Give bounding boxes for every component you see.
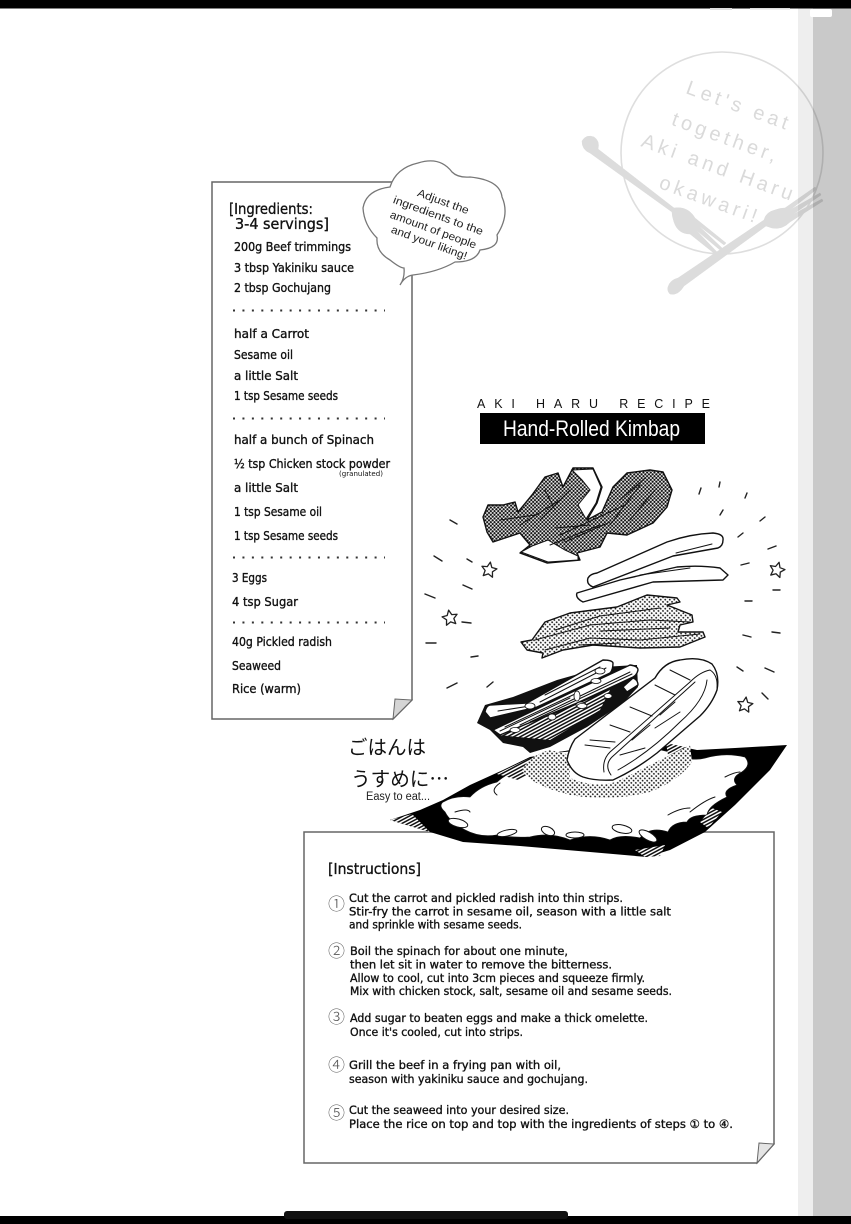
paper fold [393, 699, 412, 719]
eyebrow: AKI HARU RECIPE [477, 397, 710, 411]
paper fold [757, 1143, 774, 1163]
top status bar [0, 0, 851, 17]
step 4: season with yakiniku sauce and gochujang. [349, 1072, 588, 1086]
speech bubble: adjust the ingredients: and your liking! [389, 224, 469, 262]
group: spinach: half a bunch of Spinach [234, 433, 374, 447]
group: carrot: half a Carrot [234, 327, 309, 341]
stamp text: Aki and Haru [638, 130, 800, 207]
speech bubble: adjust the ingredients: amount of people [388, 209, 478, 251]
beef [483, 468, 672, 563]
group: spinach: 1 tsp Sesame oil [234, 505, 322, 519]
step 2 [328, 937, 672, 998]
group: other: Seaweed [232, 659, 281, 673]
fork right [668, 187, 823, 294]
group: carrot: Sesame oil [234, 348, 293, 362]
step 2: ② [328, 937, 345, 962]
motion lines [425, 482, 780, 699]
group: eggs: 3 Eggs [232, 571, 267, 585]
instructions paper [304, 832, 774, 1163]
bottom bar [0, 1211, 851, 1224]
spinach [521, 595, 705, 658]
title box [480, 413, 705, 444]
group: other: 40g Pickled radish [232, 635, 332, 649]
title: aki haru recipe [477, 397, 710, 444]
step 4 [328, 1051, 588, 1086]
step 1 [328, 890, 671, 932]
title text: Hand-Rolled Kimbap [503, 416, 680, 441]
group: beef: 200g Beef trimmings [234, 240, 351, 254]
step 2: Mix with chicken stock, salt, sesame oil and sesame seeds. [350, 984, 672, 998]
note: easy to eat [348, 731, 449, 803]
group: spinach [234, 433, 390, 543]
group: other [232, 635, 332, 696]
group: carrot [234, 327, 338, 403]
seaweed hatching [390, 743, 722, 857]
group: beef: 2 tbsp Gochujang [234, 281, 331, 295]
speech bubble: adjust the ingredients: ingredients to the [391, 194, 485, 238]
stamp text: Let's eat [683, 77, 795, 136]
group: eggs: 4 tsp Sugar [232, 595, 298, 609]
group: spinach: 1 tsp Sesame seeds [234, 529, 338, 543]
fork left [582, 136, 726, 254]
step 3: Once it's cooled, cut into strips. [350, 1025, 523, 1039]
step 3: Add sugar to beaten eggs and make a thick omelette. [350, 1011, 648, 1025]
carrot strips [577, 533, 728, 602]
step 4: Grill the beef in a frying pan with oil, [349, 1058, 561, 1072]
step 1: ① [328, 890, 345, 915]
group: eggs [232, 571, 298, 609]
stamp text: okawari! [656, 172, 764, 229]
group: carrot: a little Salt [234, 369, 298, 383]
step 2: Allow to cool, cut into 3cm pieces and squeeze firmly. [350, 971, 645, 985]
step 2: then let sit in water to remove the bitterness. [350, 958, 612, 972]
stars [441, 560, 786, 712]
ingredients heading: 3-4 servings] [235, 215, 329, 233]
group: carrot: 1 tsp Sesame seeds [234, 389, 338, 403]
logo: let's eat together stamp [582, 52, 823, 294]
note: easy to eat: Easy to eat... [366, 791, 430, 803]
group: spinach: a little Salt [234, 481, 298, 495]
step 3: ③ [328, 1003, 345, 1028]
speech bubble: adjust the ingredients: Adjust the [416, 187, 470, 217]
group: beef: 3 tbsp Yakiniku sauce [234, 261, 354, 275]
group: other: Rice (warm) [232, 682, 301, 696]
group: spinach: (granulated) [339, 470, 383, 478]
instructions heading: [Instructions] [328, 860, 421, 878]
stamp text [638, 77, 800, 229]
panel: instructions [304, 832, 774, 1163]
speech bubble: adjust the ingredients [363, 161, 505, 285]
note: easy to eat: うすめに… [351, 763, 449, 792]
ingredients heading: [Ingredients: [229, 200, 313, 218]
step 3 [328, 1003, 648, 1039]
omelette [567, 659, 718, 780]
stamp text: together, [669, 109, 783, 168]
step 1: and sprinkle with sesame seeds. [349, 918, 522, 932]
step 5 [328, 1099, 733, 1131]
radish and carrot pile [477, 660, 638, 753]
step 5: ⑤ [328, 1099, 345, 1124]
step 4: ④ [328, 1051, 345, 1076]
panel: ingredients [212, 182, 412, 719]
page edge strip [798, 8, 851, 1216]
step 2: Boil the spinach for about one minute, [350, 944, 568, 958]
illustration: kimbap ingredients [390, 468, 787, 857]
note: easy to eat: ごはんは [348, 731, 426, 760]
ingredients heading [229, 200, 329, 233]
step 5: Cut the seaweed into your desired size. [349, 1103, 569, 1117]
rice shading [522, 745, 692, 798]
group: spinach: ½ tsp Chicken stock powder [234, 457, 390, 471]
rice grains [447, 768, 740, 844]
step 1: Cut the carrot and pickled radish into thin strips. [349, 891, 623, 905]
seaweed sheet with rice [390, 743, 787, 857]
step 1: Stir-fry the carrot in sesame oil, season with a little salt [349, 904, 671, 918]
step 5: Place the rice on top and top with the ingredients of steps ① to ④. [349, 1117, 733, 1131]
ingredients paper [212, 182, 412, 719]
group: beef [234, 240, 354, 295]
